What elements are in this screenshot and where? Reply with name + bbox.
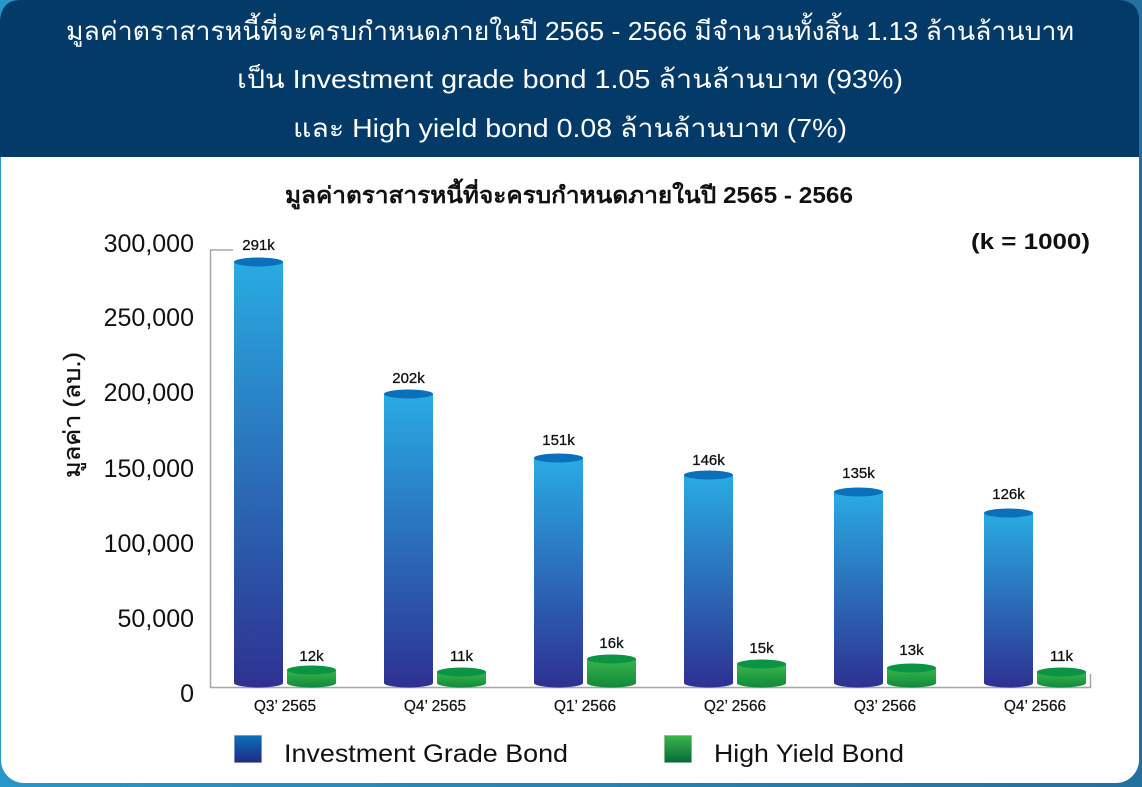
x axis labels: Q1’ 2566 bbox=[554, 698, 616, 715]
chart frame axes bbox=[210, 250, 1090, 688]
x axis labels: Q3’ 2566 bbox=[854, 698, 916, 715]
x axis labels: Q4’ 2565 bbox=[404, 698, 466, 715]
y axis labels: 150,000 bbox=[104, 455, 194, 483]
legend: Investment Grade Bond bbox=[234, 736, 568, 768]
x axis labels: Q2’ 2566 bbox=[704, 698, 766, 715]
value labels: 11k bbox=[1050, 648, 1074, 665]
value labels: 16k bbox=[599, 635, 624, 652]
unit note: (k = 1000) bbox=[971, 229, 1090, 254]
header line 3: และ High yield bond 0.08 ล้านล้านบาท (7%) bbox=[293, 113, 847, 143]
y axis title: มูลค่า (ลบ.) bbox=[59, 352, 86, 478]
value labels: 13k bbox=[899, 642, 924, 659]
series: Investment Grade Bond bbox=[234, 258, 1033, 688]
series: High Yield Bond bbox=[287, 654, 1086, 688]
value labels: 12k bbox=[299, 648, 324, 665]
value labels: 135k bbox=[842, 465, 875, 482]
value labels: 291k bbox=[242, 237, 275, 254]
value labels bbox=[242, 237, 1074, 665]
legend bbox=[234, 736, 904, 768]
y axis labels: 300,000 bbox=[104, 230, 194, 258]
panel: header band bbox=[0, 0, 1139, 157]
value labels: 11k bbox=[450, 648, 474, 665]
x axis labels: Q3’ 2565 bbox=[254, 698, 316, 715]
value labels: 151k bbox=[542, 432, 575, 449]
x axis labels bbox=[254, 698, 1066, 715]
value labels: 15k bbox=[749, 640, 774, 657]
chart title: มูลค่าตราสารหนี้ที่จะครบกำหนดภายในปี 2565 - 2566 bbox=[285, 178, 853, 210]
header line 1: มูลค่าตราสารหนี้ที่จะครบกำหนดภายในปี 2565 - 2566 มีจำนวนทั้งสิ้น 1.13 ล้านล้านบาท bbox=[66, 12, 1074, 47]
y axis labels bbox=[104, 230, 194, 708]
x axis labels: Q4’ 2566 bbox=[1004, 698, 1066, 715]
header line 2: เป็น Investment grade bond 1.05 ล้านล้านบาท (93%) bbox=[237, 63, 903, 94]
legend: High Yield Bond bbox=[664, 736, 904, 768]
y axis labels: 0 bbox=[180, 680, 194, 708]
y axis labels: 200,000 bbox=[104, 379, 194, 407]
value labels: 146k bbox=[692, 452, 725, 469]
value labels: 202k bbox=[392, 370, 425, 387]
value labels: 126k bbox=[992, 486, 1025, 503]
y axis labels: 50,000 bbox=[118, 605, 194, 633]
legend: High Yield Bond: High Yield Bond bbox=[714, 740, 904, 768]
y axis labels: 100,000 bbox=[104, 530, 194, 558]
legend: Investment Grade Bond: Investment Grade Bond bbox=[284, 740, 568, 768]
y axis labels: 250,000 bbox=[104, 304, 194, 332]
bar chart bbox=[234, 237, 1086, 688]
